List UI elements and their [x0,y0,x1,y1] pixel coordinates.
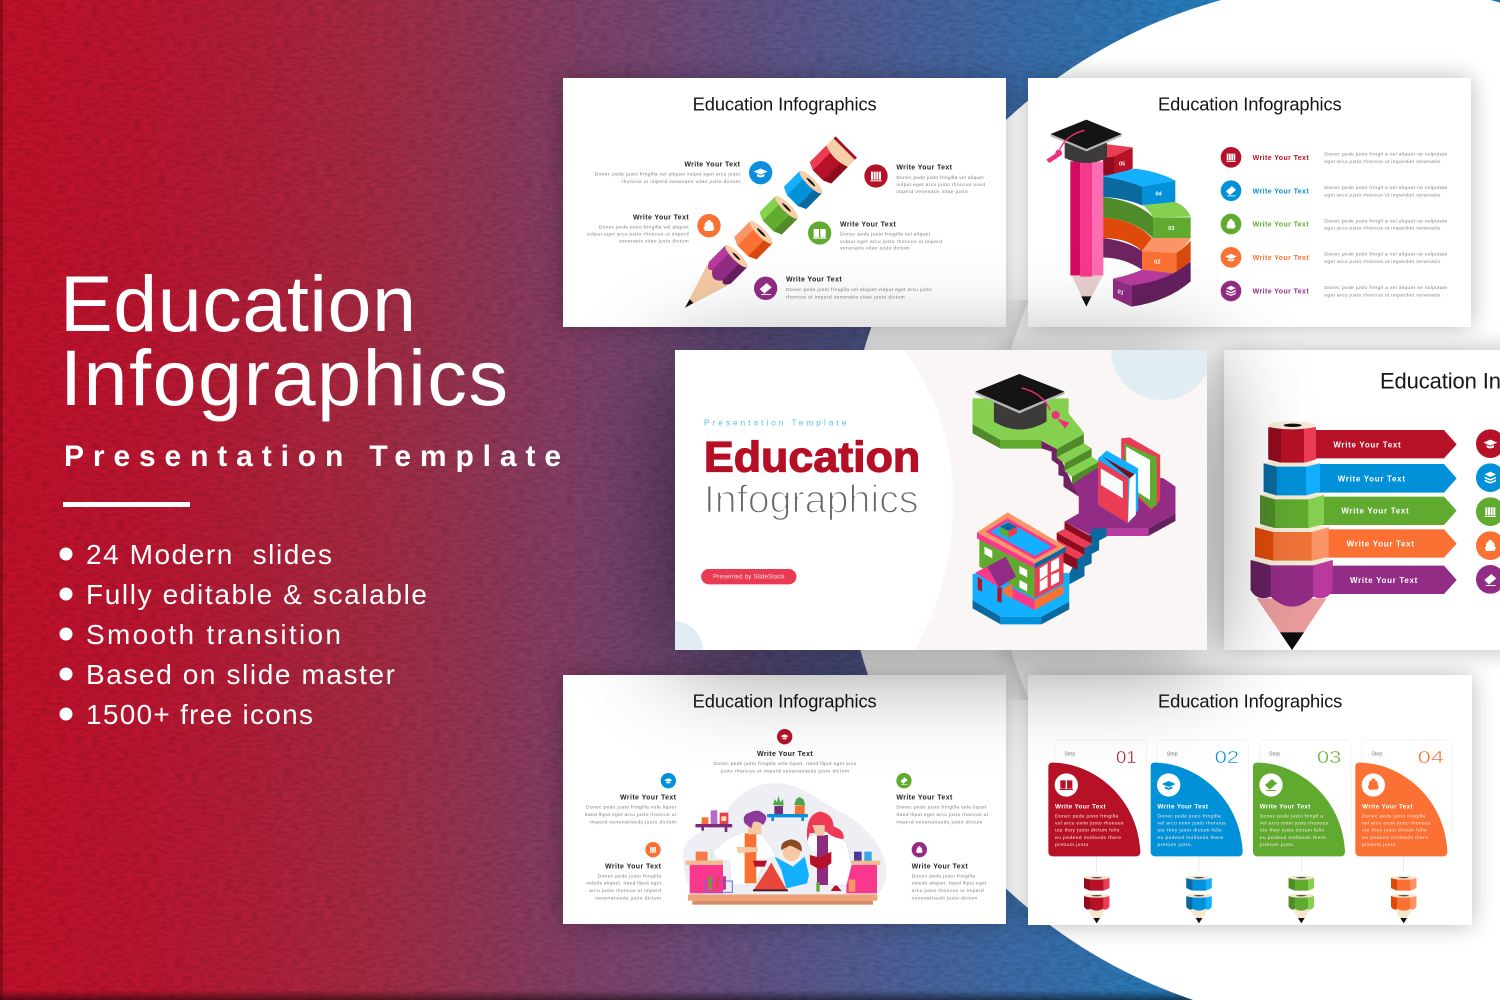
isometric illustration [973,374,1175,624]
row 4: Donec pede justo fringil a vel aliquet ne vulputate [1324,252,1448,258]
upright pencil [1251,421,1333,650]
item: middle left: venenatis vitae justo dictum [619,239,689,245]
step card 1: ute they justo dictum felis [1055,828,1120,834]
row 2: Donec pede justo fringil a vel aliquet ne vulputate [1324,185,1448,191]
panel: slide 3 title slide [675,350,1207,650]
step card 1: Step [1064,751,1075,757]
panel: slide 1 diagonal pencil [563,78,1006,327]
item: top center: Donec pede justo fringilla vele liquet. Itaed lliput eget arcu [713,761,857,767]
row 1 [1221,147,1448,168]
item: upper left [585,773,677,825]
feature list: 1500+ free icons [86,699,313,730]
step card 3: 03 [1317,747,1341,767]
step card 3 [1253,740,1351,923]
step card 2: ute they justo dictum felis [1157,828,1222,834]
item: top right: Donec pede justo fringilla vel aliquet [896,175,984,181]
inner white curved shape with soft shadow [998,300,1028,700]
step card 3: Donec pede justo fringil a [1260,813,1323,819]
item: middle right: venenatis vitae justo dictum [840,246,910,252]
blue platform with school [973,512,1069,624]
slide title: Education Infographics [693,93,877,114]
feature list: Based on slide master [86,659,395,690]
diagonal pencil [674,136,857,319]
item: top center: justo rhoncus ut imperd venenatiseds justo dictum [720,768,849,774]
slide title: Education Infographics [1158,690,1342,711]
item: bottom: Write Your Text [786,277,842,284]
item: middle right: Write Your Text [840,222,896,229]
step card 1 [1048,740,1146,923]
item: lower left: venenatiseds justo dictum [595,895,661,901]
item: top right: vulput eget arcu justo rhoncus uced [896,182,985,188]
row 2: Write Your Text [1253,188,1309,195]
curved 3D steps: 02 [1154,260,1160,266]
item: lower left: arcu justo rhoncus ut imperd [589,888,661,894]
item: top right [864,164,985,195]
arrow: red: Write Your Text [1333,440,1401,449]
row 4: eget arcu justo rhoncus ut imperdiet venenatis. [1324,259,1442,265]
arrow: orange [1325,529,1457,558]
purple platform with books [1065,437,1175,537]
item: lower right: venenatiseds justo dictum [912,895,977,901]
item: lower left: Donec pede justo fringilla [598,873,661,879]
arrow: purple: Write Your Text [1350,576,1418,585]
item: lower left [586,842,662,901]
arrow: green [1320,497,1457,525]
curved 3D steps: 04 [1156,192,1163,198]
item: top right: imperd venenatis vitae justo [896,189,968,195]
item: lower left: Write Your Text [605,863,662,870]
step card 1: eu pedeed mollseds there [1055,835,1121,841]
presentation label: Presentation Template [704,417,847,427]
item: top left: rhoncus ut imperd venenatis vitae justo dictum [622,179,740,185]
white background curved shape [841,0,1500,1000]
lab illustration [683,783,886,905]
item: middle right [808,221,942,252]
item: lower right: Write Your Text [912,863,968,870]
item: upper right: imperd venenatiseds justo dictum [896,819,982,825]
red and blue stairs [1057,522,1107,584]
step card 2: vel arcu enim justo rhonous [1157,821,1226,827]
presenter button [701,569,796,584]
arrow: green: Write Your Text [1341,507,1409,516]
step card 1: vel arcu enim justo rhonous [1055,821,1124,827]
step card 3: pretium justo. [1260,842,1295,848]
row 4 [1221,247,1448,268]
item: middle right: vulput eget arcu justo rhoncus ut imperd [840,239,942,245]
row 3: Write Your Text [1253,222,1309,229]
step card 3: Step [1269,751,1280,757]
step card 4: ute they justo dictum felis [1362,828,1427,834]
row 5: Write Your Text [1253,289,1309,296]
slide shadows [563,78,1500,925]
main title: Education [60,259,416,348]
panel: slide 6 step cards [1028,675,1472,925]
feature list [60,539,427,730]
item: top right: Write Your Text [896,165,953,172]
item: lower right: arcu justo rhoncus ut imperd [912,888,984,894]
item: upper right [896,773,989,825]
main title [60,259,508,422]
arrow: purple [1330,566,1457,594]
step card 2 [1151,740,1249,923]
step card 4 [1355,740,1452,923]
item: upper right: Donec pede justo fringilla vele liquet [896,805,987,811]
step card 2: pretium justo. [1157,842,1192,848]
step card 4: eu pedeed mollseds there [1362,835,1428,841]
heading block [60,259,561,730]
arrow: blue [1317,464,1457,493]
item: upper left: imperd venenatiseds justo dictum [590,819,676,825]
curved 3D steps: 03 [1168,226,1174,232]
divider [63,502,190,507]
item: middle left [587,214,721,245]
step card 4: 04 [1418,747,1444,767]
row 1: Donec pede justo fringil a vel aliquet ne vulputate [1324,152,1448,158]
step card 2: Donec pede justo fringilla [1157,813,1221,819]
row 1: Write Your Text [1253,155,1309,162]
item: upper left: Donec pede justo fringilla vele liquet [586,805,677,811]
item: top left: Donec pede justo fringilla vel aliquet vulput eget arcu justo [595,172,740,178]
row 5: eget arcu justo rhoncus ut imperdiet venenatis. [1324,292,1442,298]
feature list: Smooth transition [86,619,341,650]
item: lower left: veleds aliquet. Itaed lliput eget [586,881,662,887]
row 3 [1221,214,1448,234]
item: bottom: rhoncus ut imperd venenatis vitae justo dictum [786,294,905,300]
row 3: eget arcu justo rhoncus ut imperdiet venenatis. [1324,226,1442,232]
icon row [1476,429,1500,594]
panel: slide 4 stacked pencil arrows [1224,350,1500,650]
step card 1: 01 [1116,747,1137,767]
step card 4: vel arcu enim justo rhonous [1362,821,1431,827]
step card 4: Write Your Text [1362,803,1414,810]
title: Infographics: Infographics [704,479,919,521]
slide title: Education Infographics [1158,93,1342,114]
pink pencil [1070,161,1103,307]
row 2: eget arcu justo rhoncus ut imperdiet venenatis. [1324,192,1442,198]
feature list: 24 Modern slides [86,539,332,570]
main title: Infographics [60,333,508,422]
row 5: Donec pede justo fringil a vel aliquet ne vulputate [1324,285,1448,291]
step card 3: Write Your Text [1260,803,1311,810]
item: middle right: Donec pede justo fringilla vel aliquet [840,232,931,238]
step card 3: eu pedeed mollseds there [1260,835,1326,841]
item: bottom [754,277,932,300]
panel: slide 2 pencil staircase [1028,78,1471,327]
item: top left: Write Your Text [684,162,741,169]
step card 1: Donec pede justo fringilla [1055,813,1119,819]
title: Education: Education [704,434,920,482]
step card 2: eu pedeed mollseds there [1157,835,1224,841]
item: upper left: Itaed lliput eget arcu justo rhoncus ut [585,812,677,818]
arrow: orange: Write Your Text [1347,540,1414,549]
step card 4: Donec pede justo fringilla [1362,813,1426,819]
step card 1: Write Your Text [1055,803,1107,810]
step card 2: Step [1167,751,1178,757]
item: middle left: vulput eget arcu justo rhoncus ut imperd [587,232,689,238]
curved 3D steps: 05 [1119,161,1125,167]
panel: slide 5 science lab [563,675,1006,924]
row 5 [1221,281,1448,301]
curved 3D steps: 01 [1116,289,1124,297]
item: middle left: Write Your Text [633,214,689,221]
item: top center: Write Your Text [757,751,813,758]
step card 1: pretium justo. [1055,842,1090,848]
row 1: eget arcu justo rhoncus ut imperdiet venenatis. [1324,159,1442,165]
item: top left [595,161,772,185]
step card 4: pretium justo. [1362,842,1397,848]
curved 3D steps [1103,144,1191,307]
item: lower right: Donec pede justo fringilla [912,873,975,879]
row 4: Write Your Text [1253,255,1309,262]
presenter button: Presented by SlideStack [713,575,785,581]
feature list: Fully editable & scalable [86,579,427,610]
step card 2: Write Your Text [1157,803,1209,810]
slide title: Education Infographics [693,690,877,711]
item: upper right: Itaed lliput eget arcu justo rhoncus ut [896,812,989,818]
item: upper right: Write Your Text [896,795,953,802]
green platform with cap [973,374,1099,497]
item: bottom: Donec pede justo fringilla vel aliquet vulput eget arcu justo [786,287,932,293]
item: lower right [912,842,987,901]
step card 3: ute they justo dictum felis [1260,828,1324,834]
step card 2: 02 [1215,747,1239,767]
step card 3: vel arcu enim justo rhonous [1260,821,1328,827]
arrow: red [1313,430,1457,458]
step card 4: Step [1371,751,1382,757]
item: lower right: veleds aliquet. Itaed lliput eget [912,881,987,887]
item: middle left: Donec pede justo fringilla vel aliquet [599,224,689,230]
subtitle: Presentation Template [64,440,561,473]
graduation cap [1046,120,1122,163]
item: top center [713,729,857,774]
row 3: Donec pede justo fringil a vel aliquet ne vulputate [1324,218,1448,224]
item: upper left: Write Your Text [620,795,677,802]
arrow: blue: Write Your Text [1338,474,1405,483]
row 2 [1221,180,1448,201]
